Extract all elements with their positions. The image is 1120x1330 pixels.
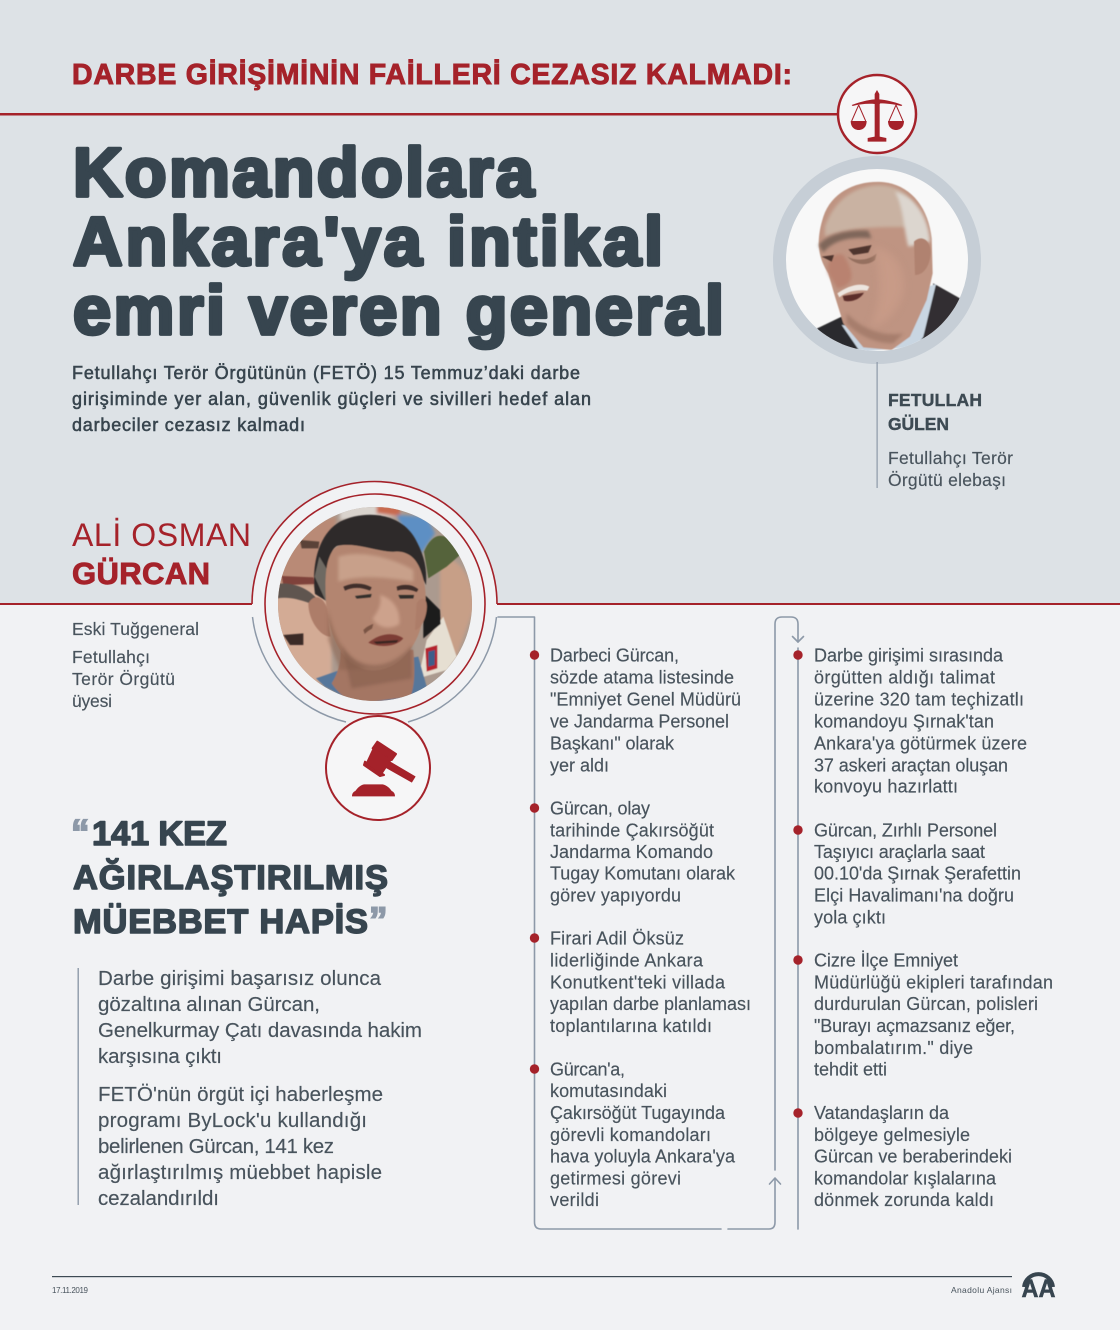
timeline column 2: komandoyu Şırnak'tan: [814, 712, 994, 732]
timeline column 2: Vatandaşların da: [814, 1103, 950, 1123]
description: Gürcan role: Fetullahçı: [72, 647, 150, 667]
rule beside summary text: [78, 968, 79, 1205]
summary text: belirlenen Gürcan, 141 kez: [98, 1135, 334, 1158]
summary text: programı ByLock'u kullandığı: [98, 1109, 367, 1132]
description: Gürcan role: [72, 619, 199, 711]
icon: scales of justice: [838, 75, 916, 153]
timeline column 1: Çakırsöğüt Tugayında: [550, 1103, 726, 1123]
name: Ali Osman Gürcan: GÜRCAN: [72, 556, 210, 591]
timeline column 2: bölgeye gelmesiyle: [814, 1125, 970, 1145]
timeline column 1: Firari Adil Öksüz: [550, 928, 684, 948]
timeline column 1: Jandarma Komando: [550, 842, 713, 862]
timeline column 2: Gürcan ve beraberindeki: [814, 1146, 1012, 1166]
timeline column 2: tehdit etti: [814, 1060, 887, 1080]
timeline column 2: durdurulan Gürcan, polisleri: [814, 994, 1038, 1014]
name: Ali Osman Gürcan: ALİ OSMAN: [72, 517, 251, 553]
header rule: [0, 113, 840, 116]
timeline column 2: [814, 646, 1053, 1210]
timeline column 1: Tugay Komutanı olarak: [550, 864, 736, 884]
timeline column 1: Gürcan'a,: [550, 1060, 625, 1080]
timeline column 1: liderliğinde Ankara: [550, 950, 704, 970]
timeline column 1: ve Jandarma Personel: [550, 712, 729, 732]
timeline column 1: görevli komandoları: [550, 1125, 711, 1145]
timeline column 2: dönmek zorunda kaldı: [814, 1190, 994, 1210]
title: Komandolara: [73, 134, 535, 211]
timeline column 1: Gürcan, olay: [550, 798, 650, 818]
timeline column 2: 00.10'da Şırnak Şerafettin: [814, 864, 1021, 884]
timeline column 2: üzerine 320 tam teçhizatlı: [814, 690, 1024, 710]
timeline column 1: sözde atama listesinde: [550, 668, 734, 688]
footer rule: [52, 1276, 1012, 1277]
quote heading: 141 KEZ: [92, 815, 227, 853]
connector: Gülen caption line: [876, 362, 878, 488]
timeline column 2: Ankara'ya götürmek üzere: [814, 734, 1027, 754]
summary text: [98, 967, 422, 1210]
timeline column 2: komandolar kışlalarına: [814, 1168, 997, 1188]
timeline column 1: verildi: [550, 1190, 599, 1210]
portrait: Fetullah Gülen: [780, 162, 974, 358]
timeline column 1: yapılan darbe planlaması: [550, 994, 751, 1014]
timeline column 1: hava yoluyla Ankara'ya: [550, 1146, 736, 1166]
timeline column 2: Müdürlüğü ekipleri tarafından: [814, 972, 1053, 992]
title: [73, 134, 724, 349]
subtitle: girişiminde yer alan, güvenlik güçleri ve sivilleri hedef alan: [72, 389, 591, 409]
summary text: cezalandırıldı: [98, 1187, 219, 1210]
timeline column 2: Darbe girişimi sırasında: [814, 646, 1004, 666]
caption: Fetullah Gülen: Örgütü elebaşı: [888, 470, 1006, 490]
portrait: Ali Osman Gürcan: [252, 481, 497, 726]
summary text: ağırlaştırılmış müebbet hapisle: [98, 1161, 382, 1184]
timeline column 1: "Emniyet Genel Müdürü: [550, 690, 741, 710]
title: emri veren general: [73, 272, 724, 349]
header kicker: DARBE GİRİŞİMİNİN FAİLLERİ CEZASIZ KALMADI:: [72, 59, 792, 91]
title: Ankara'ya intikal: [73, 203, 663, 280]
timeline column 2: bombalatırım." diye: [814, 1038, 973, 1058]
description: Gürcan role: üyesi: [72, 691, 112, 711]
summary text: gözaltına alınan Gürcan,: [98, 993, 320, 1016]
timeline column 2: "Burayı açmazsanız eğer,: [814, 1016, 1015, 1036]
timeline column 1: getirmesi görevi: [550, 1168, 681, 1188]
footer date: 17.11.2019: [52, 1286, 89, 1295]
icon: gavel: [326, 716, 430, 820]
description: Gürcan role: Eski Tuğgeneral: [72, 619, 199, 639]
timeline column 1: Konutkent'teki villada: [550, 972, 726, 992]
subtitle: Fetullahçı Terör Örgütünün (FETÖ) 15 Temmuz’daki darbe: [72, 363, 580, 383]
divider rule left and right: [0, 603, 1120, 605]
name: Ali Osman Gürcan: [72, 517, 251, 591]
background: upper section: [0, 0, 1120, 604]
quote heading: AĞIRLAŞTIRILMIŞ: [73, 857, 388, 897]
timeline column 2: Gürcan, Zırhlı Personel: [814, 820, 997, 840]
logo: Anadolu Ajansı: AA: [1022, 1275, 1056, 1303]
timeline column 2: Cizre İlçe Emniyet: [814, 950, 958, 970]
timeline column 2: yola çıktı: [814, 908, 886, 928]
summary text: FETÖ'nün örgüt içi haberleşme: [98, 1083, 383, 1106]
timeline column 1: tarihinde Çakırsöğüt: [550, 820, 714, 840]
description: Gürcan role: Terör Örgütü: [72, 669, 175, 689]
timeline column 1: [550, 646, 751, 1210]
quote heading: “: [71, 812, 90, 853]
timeline column 2: Taşıyıcı araçlarla saat: [814, 842, 985, 862]
timeline connector with arrows: [498, 617, 804, 1229]
timeline column 1: komutasındaki: [550, 1081, 667, 1101]
timeline column 2: 37 askeri araçtan oluşan: [814, 756, 1008, 776]
timeline column 2: Elçi Havalimanı'na doğru: [814, 886, 1014, 906]
timeline column 1: Darbeci Gürcan,: [550, 646, 679, 666]
caption: Fetullah Gülen: Fetullahçı Terör: [888, 448, 1013, 468]
subtitle: darbeciler cezasız kalmadı: [72, 415, 305, 435]
timeline column 1: toplantılarına katıldı: [550, 1016, 712, 1036]
quote heading: [71, 812, 388, 941]
quote heading: MÜEBBET HAPİS: [73, 902, 368, 941]
timeline column 1: görev yapıyordu: [550, 886, 681, 906]
timeline column 1: yer aldı: [550, 756, 609, 776]
timeline column 1: Başkanı" olarak: [550, 734, 675, 754]
timeline column 2: konvoyu hazırlattı: [814, 776, 958, 796]
subtitle: [72, 363, 591, 435]
caption: Fetullah Gülen: GÜLEN: [888, 414, 949, 434]
timeline column 2: örgütten aldığı talimat: [814, 668, 995, 688]
summary text: karşısına çıktı: [98, 1045, 222, 1068]
caption: Fetullah Gülen: [888, 390, 1013, 490]
timeline bullets: [530, 650, 803, 1118]
quote heading: ”: [369, 900, 388, 941]
summary text: Darbe girişimi başarısız olunca: [98, 967, 382, 990]
background: lower section: [0, 604, 1120, 1330]
summary text: Genelkurmay Çatı davasında hakim: [98, 1019, 422, 1042]
footer source: Anadolu Ajansı: [951, 1285, 1012, 1295]
caption: Fetullah Gülen: FETULLAH: [888, 390, 982, 410]
